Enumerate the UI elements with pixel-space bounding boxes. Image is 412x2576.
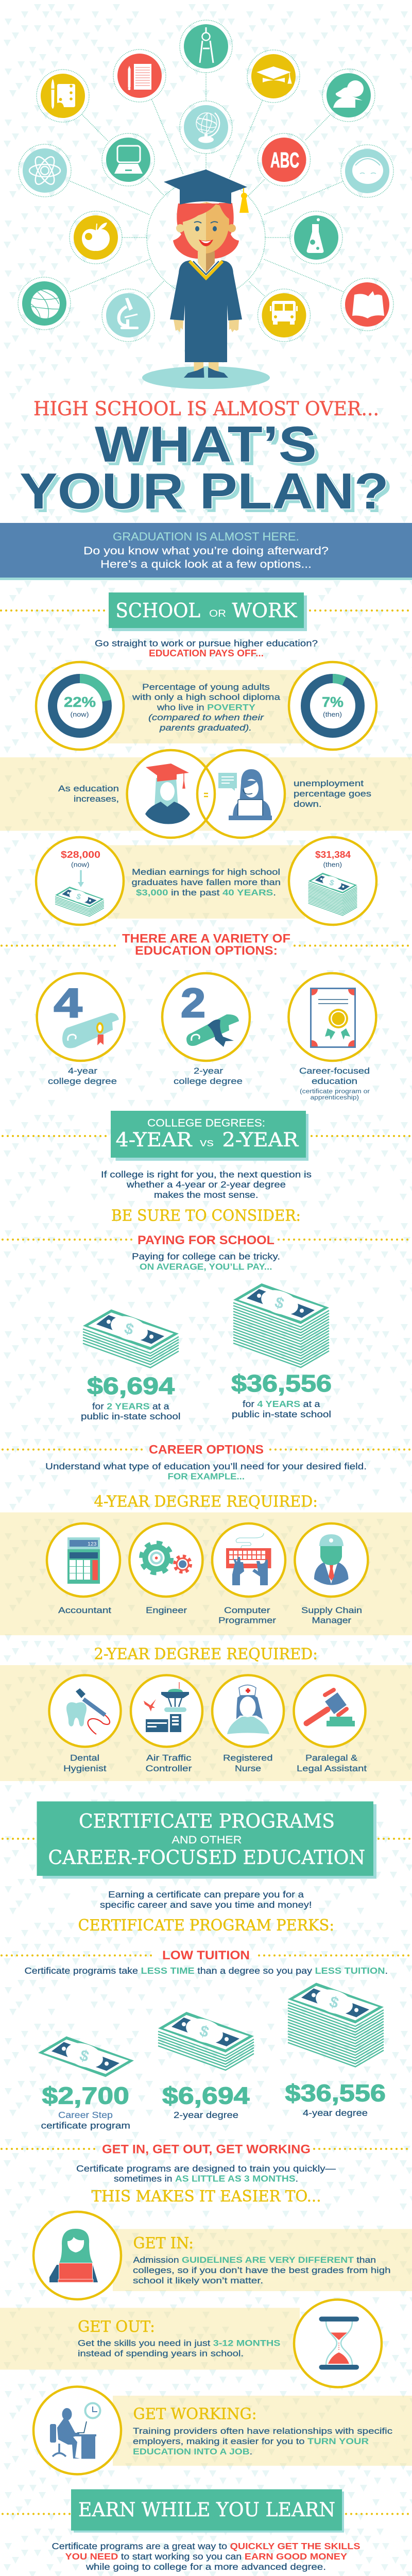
icon: graduate woman [145, 764, 190, 824]
icon: call centre agent [229, 769, 272, 820]
career: registered nurse: Registered [223, 1753, 273, 1763]
stat: 2-year degree cost: $ [198, 2022, 211, 2041]
text: poverty statistic: (compared to when their [148, 713, 265, 722]
career: computer programmer: Programmer [218, 1616, 276, 1625]
career: registered nurse: Nurse [235, 1764, 261, 1773]
title: what's your plan: YOUR PLAN? [24, 466, 393, 523]
heading box: college degrees 4-year vs 2-year: COLLEGE DEGREES: [147, 1117, 265, 1129]
text: poverty statistic: parents graduated). [159, 723, 252, 733]
career: air traffic controller [131, 1675, 202, 1773]
heading: low tuition: LOW TUITION [162, 1948, 250, 1962]
career: computer programmer: Computer [224, 1605, 270, 1615]
heading box: certificate programs and other career-focused education [37, 1801, 376, 1878]
heading box: college degrees 4-year vs 2-year: 4-YEAR [115, 1129, 193, 1151]
heading: get in get out get working: GET IN, GET OUT, GET WORKING [102, 2142, 311, 2157]
stat: 4-year cost with money stack: $36,556 [231, 1370, 332, 1397]
text: train you quickly: sometimes in AS LITTLE AS 3 MONTHS . [114, 2173, 298, 2183]
text: as education increases: increases, [74, 794, 119, 804]
text: get in details: GET IN: [133, 2234, 194, 2252]
text: earning a certificate [100, 1889, 312, 1910]
text: get in details: Admission GUIDELINES ARE VERY DIFFERENT than [133, 2255, 376, 2265]
option: 4-year college degree [37, 973, 125, 1086]
heading box: earn while you learn: EARN WHILE YOU LEARN [78, 2499, 335, 2521]
stat: 4-year cost with money stack [231, 1283, 332, 1419]
chart: 22 percent donut: 22% [64, 694, 96, 710]
icon: atom [23, 148, 67, 193]
text: understand education needed [45, 1461, 367, 1482]
text: less time less tuition: Certificate programs take LESS TIME than a degree so you pay LESS TUITION . [25, 1965, 388, 1976]
option: 4-year college degree: 4-year [68, 1066, 97, 1076]
text: get in details [133, 2234, 390, 2285]
text: median earnings: $3,000 in the past 40 YEARS . [136, 888, 276, 897]
stat: 2-year degree cost [158, 2012, 254, 2120]
title: what's your plan: YOUR PLAN? [20, 463, 389, 519]
text: get working details: employers, making it easier for you to TURN YOUR [133, 2436, 369, 2446]
stat: 2-year degree cost: $6,694 [162, 2082, 250, 2109]
title: what's your plan: WHAT’S [95, 416, 317, 472]
icon: chemistry flask [294, 215, 338, 260]
banner: graduation is almost here [0, 523, 412, 580]
chart: 7 percent donut: 7% [322, 694, 344, 710]
career: air traffic controller: Controller [145, 1764, 192, 1773]
banner: graduation is almost here: Do you know what you’re doing afterward? [83, 545, 329, 557]
career: accountant [47, 1523, 120, 1615]
hero illustration: graduate surrounded by subject icons [18, 20, 393, 389]
text: earning a certificate: Earning a certificate can prepare you for a [108, 1889, 304, 1900]
heading box: college degrees 4-year vs 2-year: vs [200, 1136, 214, 1149]
option: 2-year college degree [162, 973, 250, 1086]
panel: 2-year careers [0, 1665, 412, 1781]
career: computer programmer [212, 1523, 285, 1625]
heading box: college degrees 4-year vs 2-year: 2-YEAR [222, 1129, 299, 1151]
option: career-focused education [288, 973, 376, 1101]
title: what's your plan: YOUR PLAN? [22, 464, 391, 521]
stat: earnings then [289, 837, 376, 925]
icon: drawing compass [184, 24, 228, 69]
heading box: school or work: OR [209, 608, 226, 619]
icon: ABC blocks [262, 138, 306, 182]
stat: earnings then: $31,384 [315, 850, 351, 860]
text: if college is right for you [101, 1170, 312, 1200]
option: 2-year college degree: 2 [181, 980, 205, 1026]
career: engineer: Engineer [146, 1605, 187, 1615]
option: 2-year college degree: college degree [174, 1076, 243, 1086]
heading: 4-year degree required: 4-YEAR DEGREE REQUIRED: [94, 1493, 318, 1511]
stat: certificate program cost: $2,700 [42, 2082, 129, 2109]
heading: be sure to consider: BE SURE TO CONSIDER: [111, 1207, 301, 1225]
chart: 22 percent donut: (now) [70, 711, 89, 718]
heading: career options: CAREER OPTIONS [149, 1443, 264, 1457]
text: median earnings: Median earnings for high school [132, 867, 280, 877]
stat: earnings now: (now) [71, 861, 90, 869]
icon: notepad and pencil [117, 54, 162, 98]
stat: certificate program cost: $ [78, 2047, 91, 2065]
heading box: certificate programs and other career-focused education: CERTIFICATE PROGRAMS [79, 1810, 335, 1832]
heading box: earn while you learn [71, 2489, 344, 2533]
stat: certificate program cost: certificate program [41, 2121, 130, 2131]
career: paralegal and legal assistant [294, 1675, 367, 1773]
chart: 7 percent donut [289, 662, 376, 750]
text: paying for college can be tricky: Paying for college can be tricky. [132, 1251, 280, 1261]
text: get out details: Get the skills you need in just 3-12 MONTHS [78, 2338, 280, 2348]
stat: 2-year cost with money stack: for 2 YEARS at a [92, 1401, 169, 1412]
career: accountant: Accountant [58, 1605, 111, 1615]
heading: certificate program perks: CERTIFICATE PROGRAM PERKS: [78, 1917, 334, 1935]
stat: earnings now [36, 837, 124, 925]
career: accountant: 123 [88, 1541, 97, 1547]
stat: earnings then: (then) [323, 861, 342, 869]
text: poverty statistic: with only a high school diploma [132, 692, 281, 702]
text: go straight to work [95, 638, 318, 658]
career: dental hygienist [49, 1675, 121, 1773]
career: engineer [129, 1523, 202, 1615]
stat: 4-year degree cost: $36,556 [285, 2079, 386, 2106]
text: go straight to work: Go straight to work or pursue higher education? [95, 638, 318, 648]
text: get working details [133, 2405, 393, 2456]
career: paralegal and legal assistant: Legal Assistant [297, 1764, 367, 1773]
career: supply chain manager: Manager [312, 1616, 351, 1625]
text: certificate programs are a great way: YOU NEED to start working so you can EARN GOOD MONEY [65, 2551, 347, 2562]
icon: baby face [345, 149, 389, 193]
illustration: graduate figure [142, 170, 270, 389]
stat: earnings now: $ [75, 892, 82, 902]
stat: 4-year degree cost: $ [328, 1993, 341, 2012]
career: registered nurse [212, 1675, 284, 1773]
heading: variety of education options: THERE ARE A VARIETY OF [122, 931, 290, 946]
option: career-focused education: apprenticeship) [310, 1095, 359, 1101]
option: career-focused education: (certificate program or [300, 1089, 370, 1095]
icon: microscope [106, 293, 150, 337]
text: unemployment percentage goes down: down. [294, 799, 321, 809]
text: unemployment percentage goes down [294, 778, 371, 809]
option: career-focused education: Career-focused [299, 1066, 370, 1076]
stat: 2-year cost with money stack: $6,694 [87, 1372, 175, 1399]
text: earning a certificate: specific career and save you time and money! [100, 1900, 312, 1910]
text: get out details [78, 2318, 280, 2359]
heading: variety of education options: EDUCATION OPTIONS: [135, 944, 278, 958]
option: career-focused education: education [312, 1076, 357, 1086]
career: supply chain manager: Supply Chain [301, 1605, 362, 1615]
text: get out details: GET OUT: [78, 2318, 155, 2336]
text: paying for college can be tricky: ON AVERAGE, YOU’LL PAY... [140, 1261, 272, 1272]
icon: office worker at desk [50, 2403, 100, 2459]
panel: get out [0, 2300, 382, 2387]
stat: 4-year cost with money stack: $ [273, 1294, 286, 1313]
heading: paying for school: PAYING FOR SCHOOL [138, 1233, 274, 1247]
stat: 2-year cost with money stack: $ [123, 1320, 136, 1338]
text: if college is right for you: whether a 4-year or 2-year degree [126, 1179, 286, 1190]
text: get working details: GET WORKING: [133, 2405, 256, 2424]
text: if college is right for you: makes the most sense. [154, 1190, 259, 1200]
panel: poverty comparison [36, 662, 376, 750]
text: paying for college can be tricky [132, 1251, 280, 1272]
text: get in details: school it likely won’t matter. [133, 2276, 263, 2285]
icon: mortarboard [251, 54, 296, 98]
banner: graduation is almost here: GRADUATION IS ALMOST HERE. [113, 530, 299, 543]
stat: 4-year cost with money stack: for 4 YEARS at a [243, 1399, 320, 1409]
title: what's your plan [20, 416, 393, 523]
text: get in details: colleges, so if you don’t have the best grades from high [133, 2265, 390, 2275]
text: median earnings: graduates have fallen more than [132, 877, 281, 887]
heading box: certificate programs and other career-focused education: CAREER-FOCUSED EDUCATION [48, 1846, 365, 1869]
option: 4-year college degree: 4 [54, 980, 82, 1026]
icon: globe [184, 105, 228, 149]
heading: variety of education options [122, 931, 290, 958]
panel: education and unemployment [0, 750, 412, 838]
icon: laptop [106, 138, 150, 182]
text: get working details: Training providers often have relationships with specific [133, 2426, 393, 2436]
stat: 2-year degree cost: 2-year degree [174, 2110, 238, 2120]
title: high school is almost over: HIGH SCHOOL IS ALMOST OVER... [33, 398, 379, 420]
heading box: school or work [109, 592, 307, 631]
stat: 2-year cost with money stack [81, 1310, 180, 1421]
icon: open book [345, 282, 389, 327]
text: median earnings [132, 867, 281, 897]
title: what's your plan: WHAT’S [97, 417, 319, 474]
stat: certificate program cost [38, 2036, 134, 2131]
icon: parent and child silhouette [327, 73, 371, 117]
career: dental hygienist: Hygienist [63, 1764, 107, 1773]
icon: basketball [22, 281, 66, 326]
icon: paint palette and brush [41, 74, 85, 118]
icon: hourglass [319, 2316, 359, 2370]
icon: apple [74, 215, 118, 260]
text: poverty statistic: Percentage of young adults [142, 682, 270, 692]
career: air traffic controller: Air Traffic [146, 1753, 192, 1763]
panel: get working [33, 2386, 412, 2474]
icon: equals sign [204, 793, 208, 796]
text: get out details: instead of spending years in school. [78, 2348, 244, 2359]
text: certificate programs are a great way: Certificate programs are a great way to QUICKLY GET THE SKILLS [52, 2541, 360, 2551]
icon: speech bubble [218, 773, 237, 791]
banner: graduation is almost here: Here’s a quick look at a few options... [100, 558, 312, 570]
stat: certificate program cost: Career Step [58, 2110, 113, 2120]
chart: 7 percent donut: (then) [323, 711, 342, 718]
text: get working details: EDUCATION INTO A JOB . [133, 2447, 252, 2456]
icon: school bus [262, 293, 306, 337]
text: understand education needed: FOR EXAMPLE... [168, 1471, 245, 1482]
heading box: school or work: WORK [232, 599, 297, 622]
text: poverty statistic: who live in POVERTY [157, 703, 256, 712]
stat: 4-year degree cost [285, 1982, 386, 2118]
career: paralegal and legal assistant: Paralegal & [305, 1753, 358, 1763]
chart: 22 percent donut [36, 662, 124, 750]
icon: ABC blocks: ABC [270, 148, 299, 172]
text: train you quickly: Certificate programs are designed to train you quickly— [76, 2163, 336, 2174]
icon: woman with laptop [49, 2229, 98, 2282]
stat: 2-year cost with money stack: public in-state school [81, 1411, 180, 1421]
heading: 2-year degree required: 2-YEAR DEGREE REQUIRED: [94, 1646, 318, 1663]
text: understand education needed: Understand what type of education you’ll need for your desired field. [45, 1461, 367, 1471]
text: certificate programs are a great way: while going to college for a more advanced degree. [85, 2562, 326, 2572]
panel: median earnings [36, 837, 376, 925]
career: supply chain manager [295, 1523, 368, 1625]
text: go straight to work: EDUCATION PAYS OFF... [149, 648, 264, 658]
text: as education increases: As education [58, 784, 119, 793]
career: dental hygienist: Dental [70, 1753, 99, 1763]
stat: earnings now: $28,000 [61, 850, 100, 860]
heading box: college degrees 4-year vs 2-year [111, 1111, 308, 1161]
heading box: certificate programs and other career-focused education: AND OTHER [172, 1834, 242, 1846]
title: what's your plan: WHAT’S [99, 419, 321, 476]
text: poverty statistic [132, 682, 281, 733]
panel: get in [33, 2212, 412, 2299]
heading: this makes it easier to: THIS MAKES IT EASIER TO... [92, 2188, 321, 2206]
heading box: school or work: SCHOOL [115, 599, 200, 622]
text: unemployment percentage goes down: percentage goes [294, 789, 371, 799]
option: 4-year college degree: college degree [48, 1076, 117, 1086]
panel: 4-year careers [0, 1513, 412, 1635]
text: as education increases [58, 784, 119, 804]
text: train you quickly [76, 2163, 336, 2183]
stat: 4-year cost with money stack: public in-state school [232, 1409, 331, 1419]
text: if college is right for you: If college is right for you, the next question is [101, 1170, 312, 1180]
text: unemployment percentage goes down: unemployment [294, 778, 364, 788]
option: 2-year college degree: 2-year [194, 1066, 223, 1076]
stat: earnings then: $ [328, 878, 335, 888]
text: certificate programs are a great way [52, 2541, 360, 2572]
stat: 4-year degree cost: 4-year degree [303, 2108, 368, 2118]
